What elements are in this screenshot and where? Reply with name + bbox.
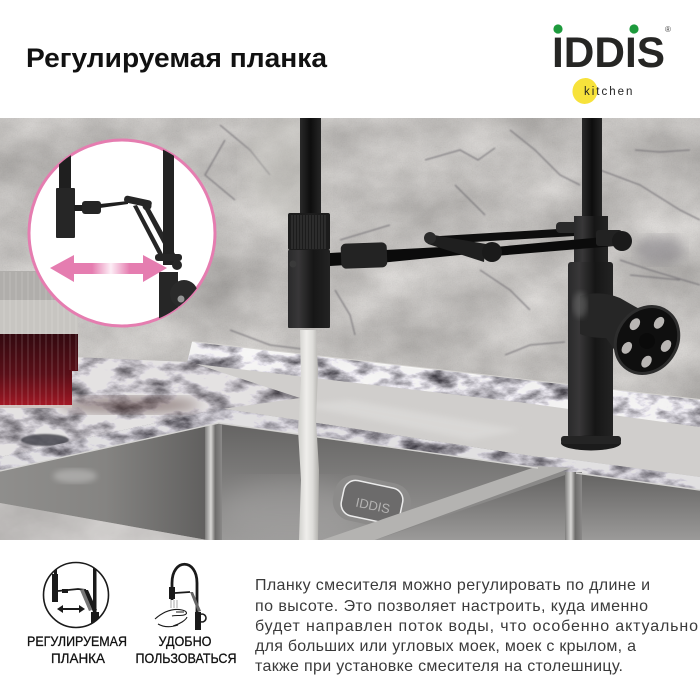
logo: IDDIS kitchen	[552, 24, 671, 107]
arrow: horizontal adjustment	[50, 255, 167, 282]
description text: по высоте. Это позволяет настроить, куда именно	[255, 598, 648, 615]
right post	[582, 118, 602, 218]
description text: будет направлен поток воды, что особенно актуально	[255, 618, 698, 635]
sink badge	[333, 475, 406, 524]
logo: IDDIS kitchen: kitchen	[584, 86, 634, 98]
base	[561, 436, 621, 450]
spout pipe	[300, 118, 321, 214]
icon label: convenient to use	[136, 633, 236, 666]
icon label: adjustable bar	[27, 633, 127, 666]
marble backsplash	[0, 118, 700, 423]
callout circle: adjustable bar close-up	[29, 140, 215, 326]
icon label: adjustable bar: РЕГУЛИРУЕМАЯ	[27, 633, 127, 649]
sink badge: IDDIS	[354, 495, 392, 517]
glass with wine	[0, 271, 78, 408]
handle wheel	[614, 305, 680, 375]
icon: convenient to use	[155, 564, 206, 630]
faucet	[288, 118, 692, 450]
left sink	[0, 423, 700, 540]
counter surface	[187, 342, 700, 480]
left front counter	[0, 503, 207, 540]
front arm	[330, 247, 462, 266]
rear arm	[440, 229, 574, 242]
counter front edge	[0, 408, 700, 490]
icon label: convenient to use: УДОБНО	[158, 633, 212, 649]
photo: kitchen scene	[0, 110, 700, 540]
description text: также при установке смесителя на столешницу.	[255, 658, 623, 675]
logo: IDDIS kitchen: IDDIS	[552, 29, 665, 77]
left counter	[0, 350, 300, 460]
body	[568, 262, 613, 438]
water stream	[298, 330, 319, 540]
description text: для больших или угловых моек, моек с крылом, а	[255, 638, 636, 655]
arm knobs	[428, 234, 486, 262]
title: Регулируемая планка	[26, 43, 328, 73]
counter back ledge veins	[188, 342, 700, 427]
description text: Планку смесителя можно регулировать по длине и	[255, 577, 650, 594]
icon label: adjustable bar: ПЛАНКА	[51, 650, 106, 666]
right sink and divider	[0, 423, 700, 540]
logo: IDDIS kitchen: ®	[665, 25, 671, 34]
spray head	[288, 213, 330, 328]
icon label: convenient to use: ПОЛЬЗОВАТЬСЯ	[136, 650, 236, 666]
icon: adjustable bar	[44, 562, 108, 628]
description text	[255, 577, 698, 675]
